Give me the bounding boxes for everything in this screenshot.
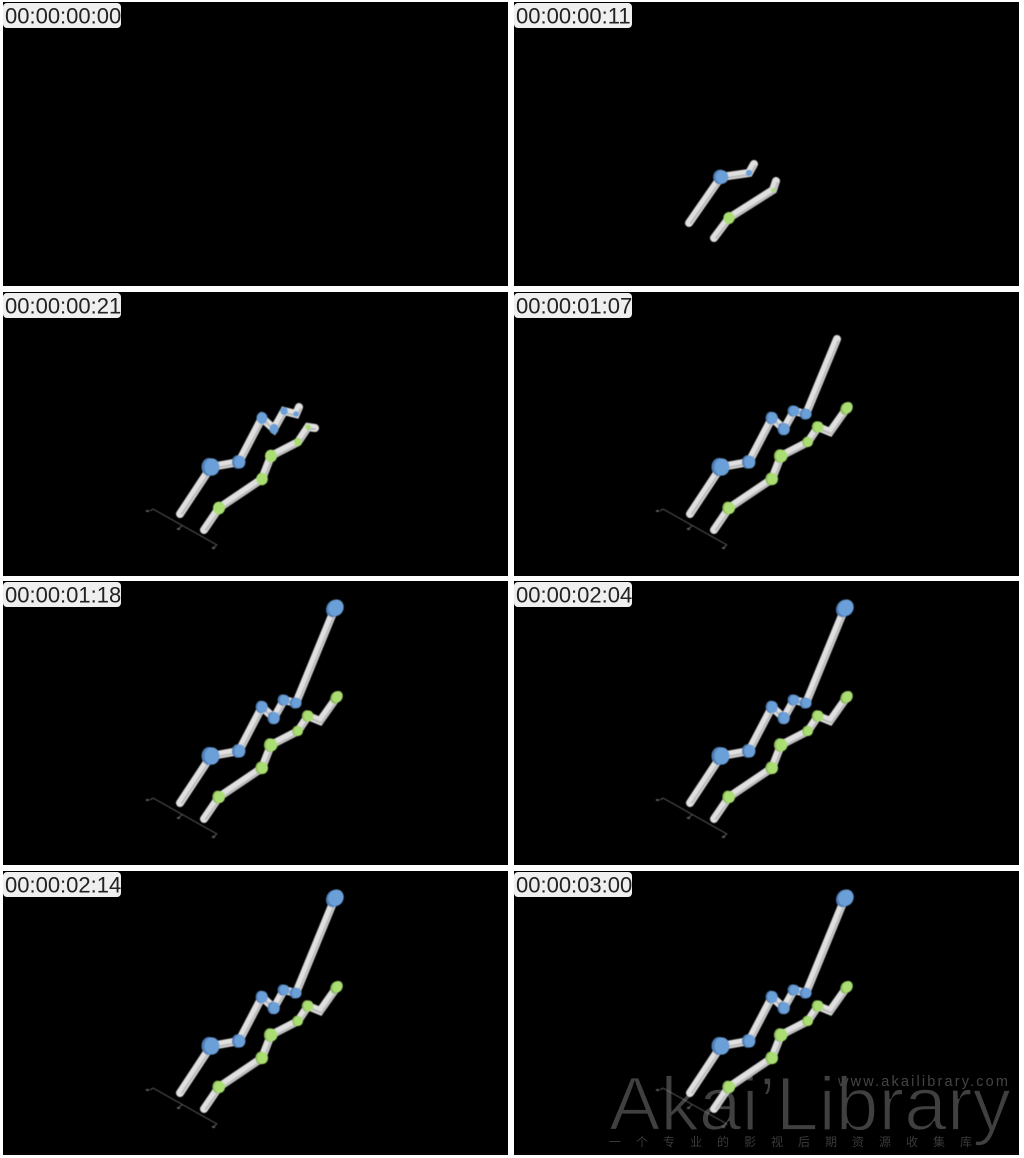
chart: lines at 00:00:01:18 [146,597,346,837]
watermark url: www.akailibrary.com [837,1074,1008,1090]
panel: frame 00:00:01:07 [514,292,1019,576]
panel: frame 00:00:02:04 [514,581,1019,865]
chart: partial lines at 00:00:00:11 [689,164,778,238]
panel: frame 00:00:00:00 [3,2,508,286]
timecode 00:00:00:11: 00:00:00:11 [516,4,631,28]
chart: lines at 00:00:02:14 [146,887,346,1127]
panel: frame 00:00:01:18 [3,581,508,865]
timecode 00:00:01:18: 00:00:01:18 [5,582,121,608]
timecode 00:00:03:00: 00:00:03:00 [516,872,632,898]
panel: frame 00:00:02:14 [3,871,508,1155]
timecode 00:00:01:07: 00:00:01:07 [516,294,632,318]
chart: partial lines at 00:00:00:21 [146,407,315,548]
watermark tagline: 一个专业的影视后期资源收集库 [609,1134,987,1149]
timecode 00:00:02:14: 00:00:02:14 [5,872,121,898]
timecode 00:00:00:00: 00:00:00:00 [5,4,121,28]
chart: lines at 00:00:03:00 [656,887,856,1127]
chart: lines at 00:00:01:07 [656,339,855,548]
panel: frame 00:00:03:00 [514,871,1019,1155]
chart: lines at 00:00:02:04 [656,597,856,837]
watermark logo text: Akai’Library [609,1062,1011,1147]
timecode 00:00:00:21: 00:00:00:21 [5,294,121,318]
panel: frame 00:00:00:11 [514,2,1019,286]
timecode 00:00:02:04: 00:00:02:04 [516,582,632,608]
panel: frame 00:00:00:21 [3,292,508,576]
